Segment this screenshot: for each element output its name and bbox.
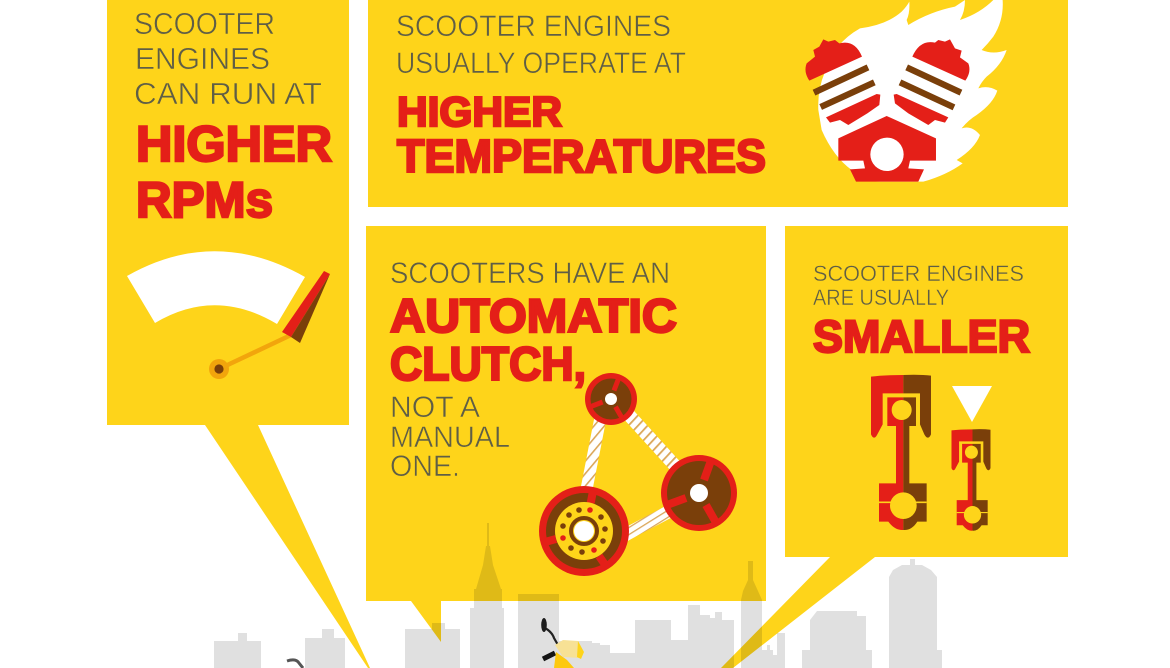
heading: higher temperatures: [397, 88, 766, 182]
heading: automatic clutch: CLUTCH,: [390, 337, 586, 390]
text: scooter engines are usually: [813, 261, 1024, 310]
text: scooter engines usually operate at: [396, 10, 686, 80]
panel: automatic clutch: [366, 226, 766, 642]
panel: higher temperatures: [368, 0, 1068, 207]
text: scooter engines can run at: ENGINES: [135, 41, 270, 76]
icon: rev gauge: [127, 251, 330, 379]
heading: smaller: SMALLER: [813, 311, 1030, 362]
panel: higher RPMs: [107, 0, 370, 668]
text: scooter engines can run at: [134, 6, 322, 111]
heading: higher temperatures: HIGHER: [397, 88, 562, 135]
text: not a manual one: ONE.: [390, 450, 460, 483]
heading: automatic clutch: AUTOMATIC: [390, 289, 677, 342]
text: not a manual one: NOT A: [390, 391, 480, 424]
text: scooter engines usually operate at: SCOOTER ENGINES: [396, 10, 671, 43]
heading: higher RPMs: RPMs: [136, 172, 273, 228]
text: scooter engines are usually: ARE USUALLY: [813, 285, 949, 310]
text: scooter engines are usually: SCOOTER ENGINES: [813, 261, 1024, 286]
heading: higher RPMs: HIGHER: [136, 116, 332, 172]
text: not a manual one: [390, 391, 510, 483]
icon: flaming engine: [805, 0, 1007, 182]
text: not a manual one: MANUAL: [390, 421, 510, 454]
heading: automatic clutch: [390, 289, 677, 390]
text: scooter engines usually operate at: USUALLY OPERATE AT: [396, 47, 686, 80]
heading: higher temperatures: TEMPERATURES: [397, 130, 766, 182]
icon: large piston: [871, 375, 931, 530]
text: scooter engines can run at: CAN RUN AT: [134, 76, 322, 111]
text: scooter engines can run at: SCOOTER: [134, 6, 275, 41]
skyline: [214, 523, 942, 668]
icon: small piston: [951, 429, 990, 531]
heading: higher RPMs: [136, 116, 332, 228]
icon: clutch belt and pulleys: [539, 373, 737, 576]
panel: smaller engines: [721, 226, 1068, 668]
icon: down arrow: [952, 386, 992, 422]
text: scooters have an: SCOOTERS HAVE AN: [390, 257, 670, 290]
scooter rider: [287, 618, 584, 668]
